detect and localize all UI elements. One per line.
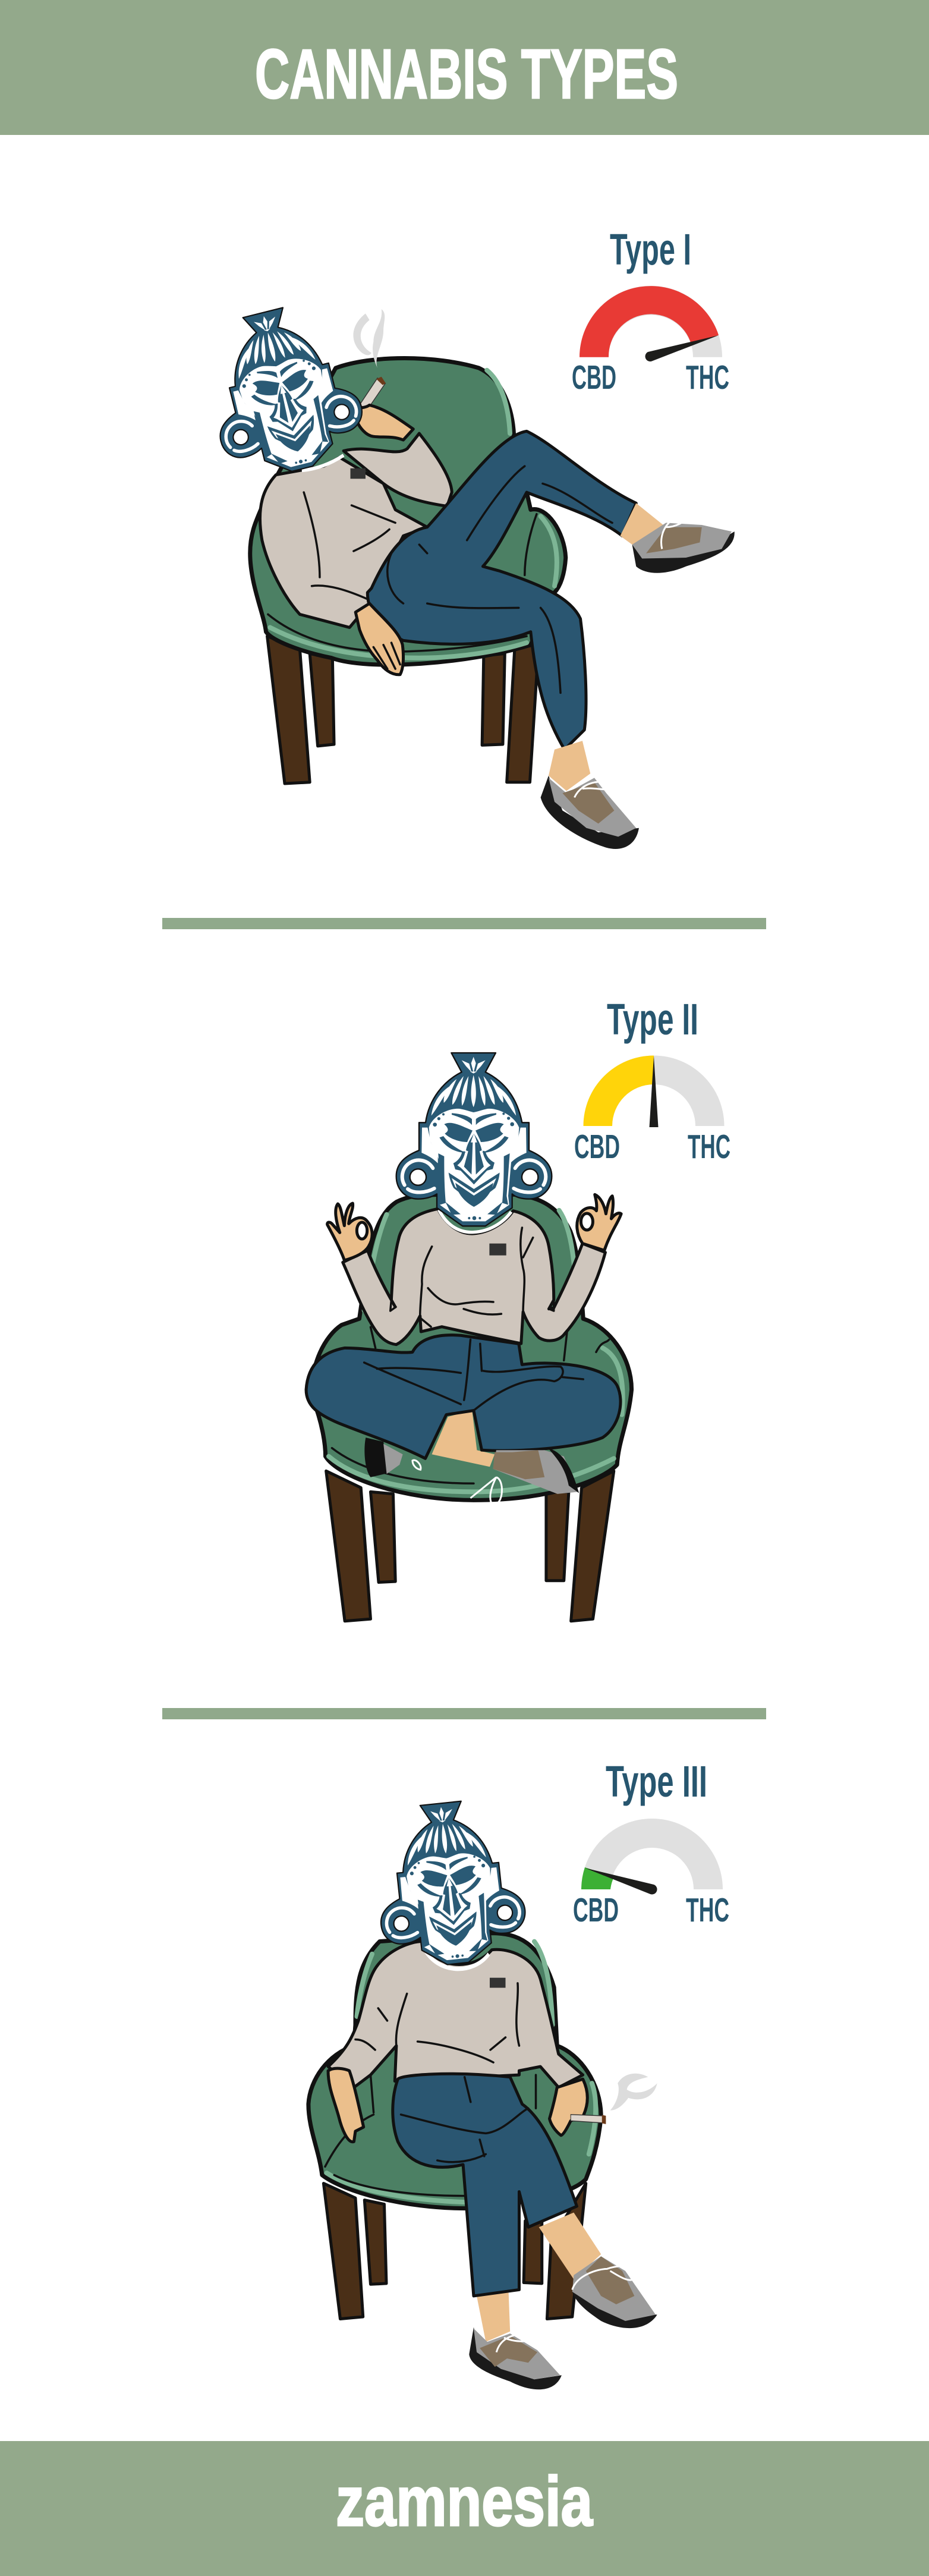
- gauge: type III: [573, 1757, 729, 1929]
- joint and hand: [344, 377, 413, 440]
- sneaker lower: [541, 776, 639, 849]
- sneaker upper: [632, 514, 735, 573]
- type label: Type II: [607, 995, 698, 1044]
- hand: left ok gesture: [327, 1203, 372, 1260]
- icon: tribal mask, type II: [396, 1053, 552, 1226]
- shins: [549, 503, 666, 791]
- hand: right ok gesture: [577, 1194, 621, 1250]
- logo: zamnesia: zamnesia: [336, 2462, 593, 2541]
- sneaker lower: [469, 2327, 562, 2389]
- smoke: [353, 309, 385, 368]
- sneaker upper: [572, 2256, 657, 2328]
- shins: [432, 1411, 495, 1467]
- gauge: type III: THC: [686, 1891, 729, 1929]
- footer band: [0, 2441, 929, 2576]
- chair legs: [267, 636, 538, 784]
- needle: [585, 1868, 657, 1895]
- jeans: [367, 431, 636, 750]
- divider: [162, 1708, 766, 1719]
- sweater: [328, 1942, 583, 2087]
- smoke: [610, 2074, 657, 2111]
- axis labels: CBD: [573, 1891, 619, 1929]
- gauge: type I: THC: [686, 358, 729, 397]
- jeans: [306, 1335, 621, 1458]
- type label: Type I: [610, 225, 691, 274]
- sweater and hands: [327, 1194, 621, 1345]
- needle: [645, 335, 719, 361]
- figure: type II meditating on chair: [306, 1194, 632, 1621]
- figure: type I reclining on chair: [250, 309, 735, 849]
- left hand: [328, 2068, 364, 2142]
- title: CANNABIS TYPES: [255, 35, 678, 114]
- needle: [649, 1056, 659, 1127]
- axis labels: CBD: [574, 1128, 620, 1166]
- right sneaker: [471, 1448, 579, 1505]
- dial: [581, 1819, 723, 1889]
- icon: tribal mask, type III: [369, 1796, 530, 1971]
- gauge: type II: THC: [688, 1128, 730, 1166]
- chair legs: [323, 2184, 586, 2319]
- axis labels: CBD: [572, 358, 616, 397]
- header band: [0, 0, 929, 135]
- joint and right hand: [549, 2079, 606, 2135]
- figure: type III seated cross-legged: [308, 1933, 657, 2389]
- left sneaker: [364, 1438, 421, 1477]
- type label: Type III: [606, 1757, 707, 1806]
- dial: [584, 1056, 724, 1126]
- icon: tribal mask, type I: [193, 295, 373, 486]
- gauge: type I: [572, 225, 729, 397]
- armchair: [312, 1194, 632, 1500]
- armchair: [250, 358, 566, 665]
- armchair: [308, 1933, 601, 2209]
- chair legs: [326, 1471, 614, 1621]
- forearm and hand, lower: [355, 603, 404, 675]
- jeans: [393, 2074, 577, 2296]
- sweater: [260, 433, 452, 627]
- gauge: type II: [574, 995, 730, 1166]
- dial: [580, 286, 722, 357]
- shins: [477, 2213, 601, 2342]
- divider: [162, 918, 766, 929]
